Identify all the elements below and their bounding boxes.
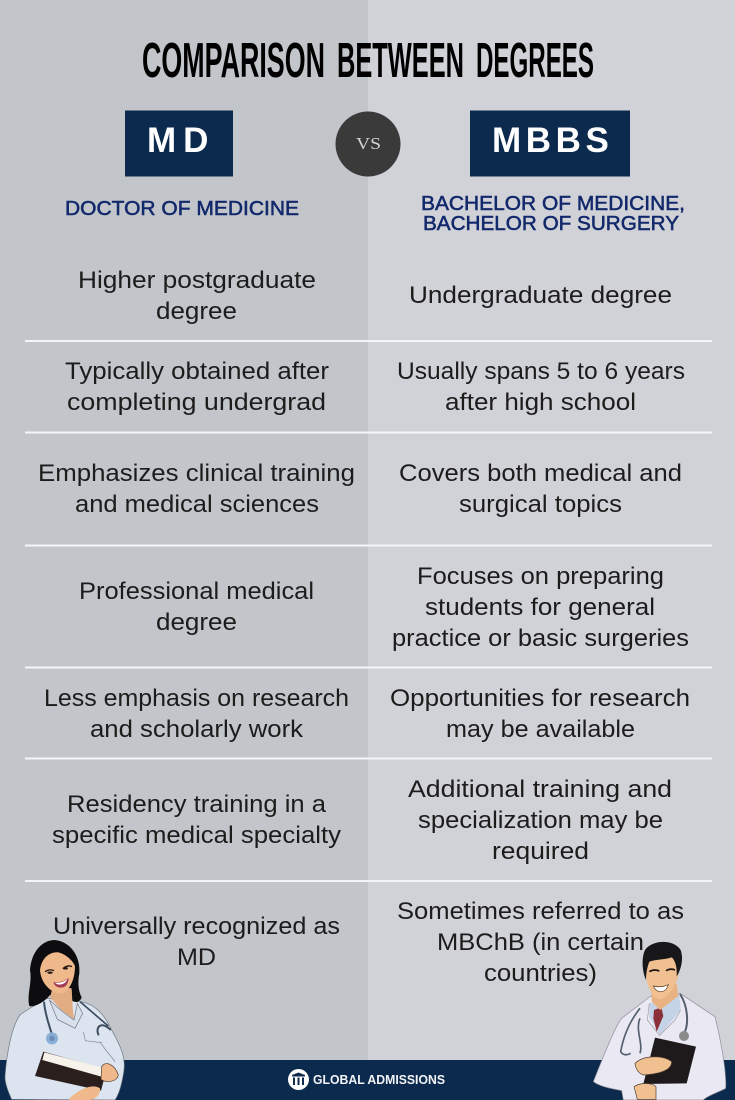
row 7 right: countries) <box>484 960 597 987</box>
row 4 right: practice or basic surgeries <box>392 625 689 652</box>
row 3 left: Emphasizes clinical training <box>38 460 355 487</box>
row 7 left: Universally recognized as <box>53 913 340 940</box>
row 2 left: Typically obtained after <box>65 358 329 385</box>
row 6 left <box>52 791 341 849</box>
row 3 left <box>38 460 355 518</box>
row 7 left: MD <box>177 944 216 971</box>
row 1 left: Higher postgraduate <box>78 267 316 294</box>
row dividers <box>25 340 712 882</box>
row 5 left: Less emphasis on research <box>44 685 349 712</box>
row 6 left: Residency training in a <box>67 791 327 818</box>
row 2 left: completing undergrad <box>67 389 326 416</box>
row 3 left: and medical sciences <box>75 491 319 518</box>
illustration: male doctor <box>593 942 726 1100</box>
row 6 left: specific medical specialty <box>52 822 341 849</box>
VS circle <box>336 112 400 176</box>
row 4 left: degree <box>156 609 237 636</box>
footer bar <box>0 1060 735 1100</box>
row 7 right: Sometimes referred to as <box>397 898 684 925</box>
row 6 right <box>408 776 672 865</box>
row 7 right: MBChB (in certain <box>437 929 644 956</box>
row 5 left <box>44 685 349 743</box>
heading: bachelor of medicine, bachelor of surgery <box>421 192 685 235</box>
row 4 left: Professional medical <box>79 578 314 605</box>
heading: bachelor of medicine, bachelor of surgery: BACHELOR OF MEDICINE, <box>421 192 685 215</box>
row 3 right: Covers both medical and <box>399 460 682 487</box>
row 1 left <box>78 267 316 325</box>
MBBS badge <box>470 110 630 176</box>
row 2 left <box>65 358 329 416</box>
footer bar: GLOBAL ADMISSIONS <box>313 1073 445 1087</box>
VS circle: VS <box>356 134 381 153</box>
row 7 left <box>53 913 340 971</box>
MBBS badge: MBBS <box>492 121 613 160</box>
row 4 right: Focuses on preparing <box>417 563 664 590</box>
row 1 right: Undergraduate degree <box>409 282 672 309</box>
row 6 right: specialization may be <box>418 807 663 834</box>
row 5 left: and scholarly work <box>90 716 304 743</box>
row 1 left: degree <box>156 298 237 325</box>
row 2 right <box>397 358 685 416</box>
row 2 right: after high school <box>445 389 636 416</box>
heading: bachelor of medicine, bachelor of surgery: BACHELOR OF SURGERY <box>423 212 679 235</box>
row 2 right: Usually spans 5 to 6 years <box>397 358 685 385</box>
row 6 right: Additional training and <box>408 776 672 803</box>
text: DEGREES <box>476 34 594 88</box>
row 4 right: students for general <box>425 594 655 621</box>
row 4 left <box>79 578 314 636</box>
title: BETWEEN <box>337 34 464 88</box>
row 3 right <box>399 460 682 518</box>
title: COMPARISON <box>142 34 325 88</box>
row 5 right: Opportunities for research <box>390 685 690 712</box>
heading: doctor of medicine: DOCTOR OF MEDICINE <box>65 197 299 220</box>
row 7 right <box>397 898 684 987</box>
row 6 right: required <box>492 838 589 865</box>
footer logo <box>288 1069 309 1090</box>
MD badge <box>125 110 233 176</box>
MD badge: MD <box>147 121 215 160</box>
illustration: female doctor <box>5 940 124 1100</box>
row 3 right: surgical topics <box>459 491 622 518</box>
row 5 right: may be available <box>446 716 635 743</box>
row 5 right <box>390 685 690 743</box>
row 4 right <box>392 563 689 652</box>
